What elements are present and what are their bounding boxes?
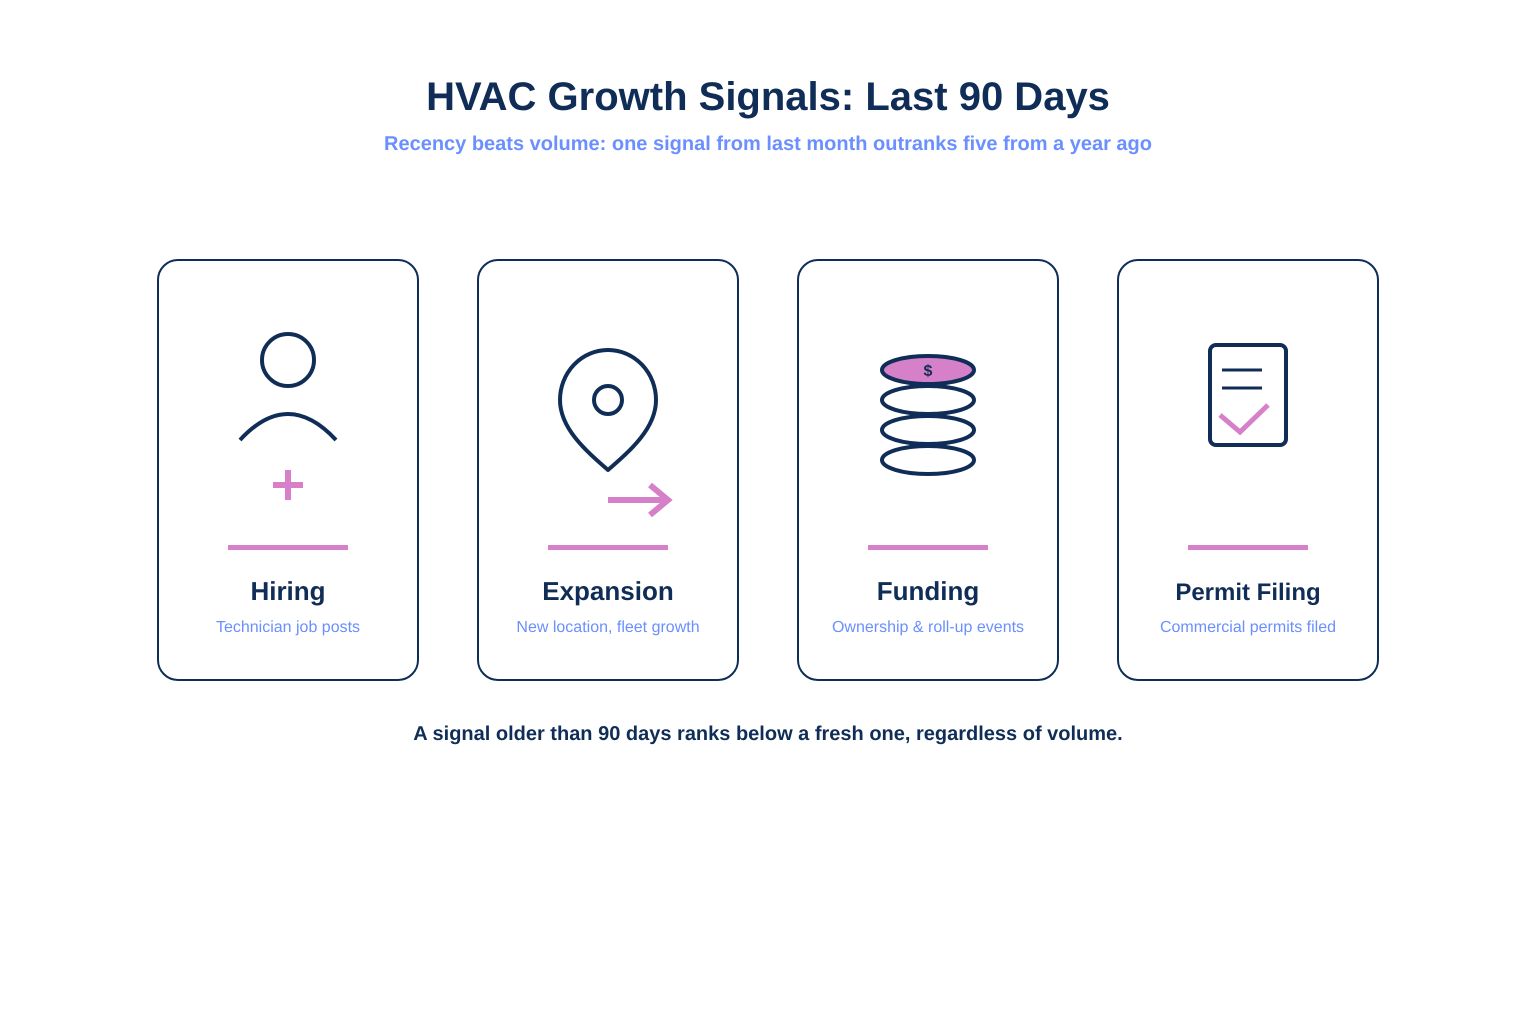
icon: map pin with arrow	[560, 350, 668, 515]
footer note: A signal older than 90 days ranks below a fresh one, regardless of volume.	[413, 723, 1123, 745]
panel: expansion	[478, 260, 738, 680]
heading: funding: Funding	[877, 576, 979, 606]
heading: hiring: Hiring	[250, 576, 326, 606]
heading: expansion: Expansion	[542, 576, 674, 606]
description: funding: Ownership & roll-up events	[832, 619, 1024, 636]
description: expansion: New location, fleet growth	[516, 619, 700, 636]
panel: funding	[798, 260, 1058, 680]
panel: permit filing	[1118, 260, 1378, 680]
description: hiring: Technician job posts	[216, 619, 360, 636]
icon: coin stack: $	[924, 363, 933, 380]
title: HVAC Growth Signals: Last 90 Days	[426, 75, 1110, 119]
description: permit filing: Commercial permits filed	[1160, 619, 1336, 636]
panel: hiring	[158, 260, 418, 680]
subtitle: Recency beats volume: one signal from last month outranks five from a year ago	[384, 133, 1152, 155]
icon: document with check	[1210, 345, 1286, 445]
icon: person with plus	[240, 334, 336, 500]
heading: permit filing: Permit Filing	[1175, 579, 1321, 606]
icon: coin stack	[882, 356, 974, 474]
